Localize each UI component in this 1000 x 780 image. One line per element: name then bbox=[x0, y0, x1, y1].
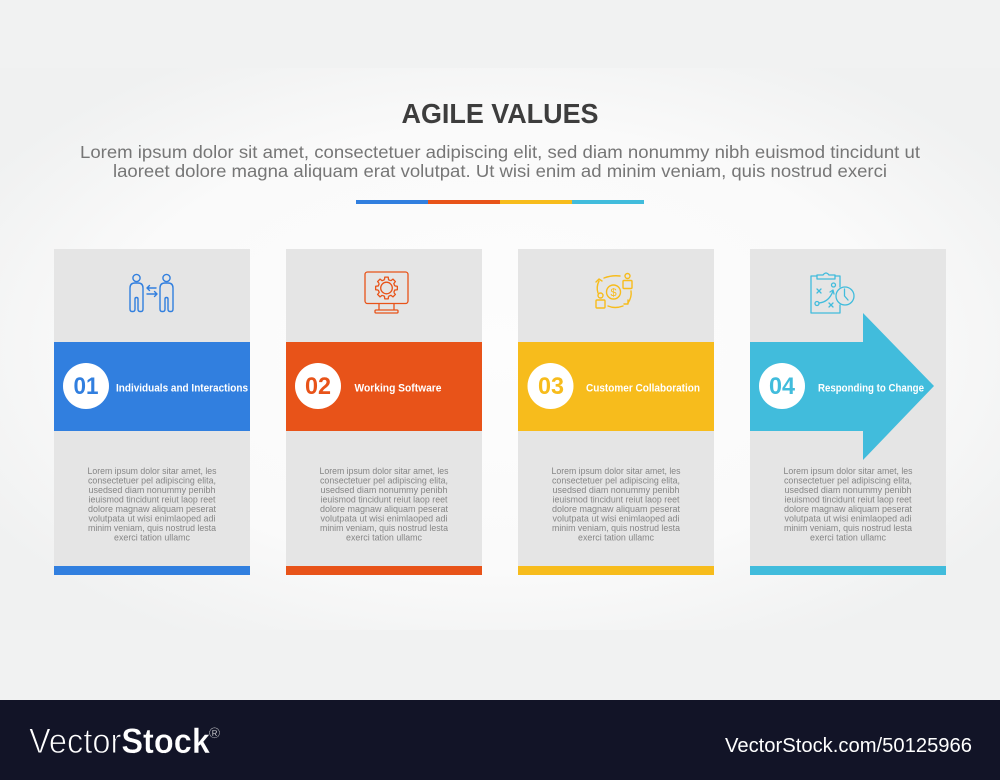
body text: dolore magnaw aliquam peserat bbox=[784, 504, 913, 514]
body text bbox=[320, 466, 449, 542]
body text: exerci tation ullamc bbox=[578, 532, 655, 542]
body text: minim veniam, quis nostrud lesta bbox=[784, 523, 912, 533]
body text: dolore magnaw aliquam peserat bbox=[88, 504, 217, 514]
body text: dolore magnaw aliquam peserat bbox=[320, 504, 449, 514]
footer logo: VectorStock bbox=[29, 722, 210, 761]
body text: usedsed diam nonummy penibh bbox=[320, 485, 448, 495]
panel: 02 working software bbox=[286, 249, 482, 575]
subtitle text block: Lorem ipsum dolor sit amet, consectetuer adipiscing elit, sed diam nonummy nibh euismod tincidunt ut bbox=[80, 142, 920, 162]
icon: people and money cycle bbox=[596, 274, 632, 308]
number badge 02 bbox=[295, 363, 341, 409]
body text: minim veniam, quis nostrud lesta bbox=[88, 523, 216, 533]
body text: Lorem ipsum dolor sitar amet, les bbox=[320, 466, 449, 476]
body text: minim veniam, quis nostrud lesta bbox=[320, 523, 448, 533]
icon: clipboard plan with clock bbox=[811, 273, 854, 313]
panel: 03 customer collaboration bbox=[518, 249, 714, 575]
icon: monitor with gear bbox=[365, 272, 408, 313]
number badge 01 bbox=[63, 363, 109, 409]
body text: volutpata ut wisi enimlaoped adi bbox=[88, 514, 216, 524]
body text: ieuismod tincidunt reiut laop reet bbox=[552, 494, 680, 504]
arrow bbox=[750, 313, 934, 460]
body text: ieuismod tincidunt reiut laop reet bbox=[784, 494, 912, 504]
subtitle text block: laoreet dolore magna aliquam erat volutpat. Ut wisi enim ad minim veniam, quis nostrud exerci bbox=[113, 161, 887, 181]
body text: exerci tation ullamc bbox=[810, 532, 887, 542]
number badge 04 bbox=[759, 363, 805, 409]
body text: dolore magnaw aliquam peserat bbox=[552, 504, 681, 514]
colored title divider bbox=[356, 200, 644, 204]
body text: usedsed diam nonummy penibh bbox=[88, 485, 216, 495]
body text: usedsed diam nonummy penibh bbox=[784, 485, 912, 495]
body text: volutpata ut wisi enimlaoped adi bbox=[320, 514, 448, 524]
body text: usedsed diam nonummy penibh bbox=[552, 485, 680, 495]
number badge 03 bbox=[528, 363, 574, 409]
body text: exerci tation ullamc bbox=[346, 532, 423, 542]
icon: people and money cycle: $ bbox=[610, 287, 617, 299]
body text: ieuismod tincidunt reiut laop reet bbox=[88, 494, 216, 504]
body text: Lorem ipsum dolor sitar amet, les bbox=[784, 466, 913, 476]
subtitle text block bbox=[80, 142, 920, 181]
footer bar bbox=[0, 700, 1000, 780]
body text: Lorem ipsum dolor sitar amet, les bbox=[88, 466, 217, 476]
panel: 01 individuals and interactions bbox=[54, 249, 250, 575]
body text: volutpata ut wisi enimlaoped adi bbox=[784, 514, 912, 524]
body text: exerci tation ullamc bbox=[114, 532, 191, 542]
heading: Working Software bbox=[354, 382, 442, 394]
heading: Individuals and Interactions bbox=[116, 382, 248, 394]
panel: 04 responding to change bbox=[750, 249, 946, 575]
body text: minim veniam, quis nostrud lesta bbox=[552, 523, 680, 533]
body text bbox=[784, 466, 913, 542]
body text bbox=[88, 466, 217, 542]
body text: consectetuer pel adipiscing elita, bbox=[784, 476, 912, 486]
number badge 02: 02 bbox=[305, 373, 331, 400]
body text: consectetuer pel adipiscing elita, bbox=[320, 476, 448, 486]
number badge 04: 04 bbox=[769, 373, 796, 400]
number badge 03: 03 bbox=[538, 373, 564, 400]
body text: consectetuer pel adipiscing elita, bbox=[552, 476, 680, 486]
heading: Responding to Change bbox=[818, 382, 924, 394]
body text: ieuismod tincidunt reiut laop reet bbox=[320, 494, 448, 504]
number badge 01: 01 bbox=[74, 373, 98, 400]
registered mark: ® bbox=[209, 725, 220, 742]
footer url: VectorStock.com/50125966 bbox=[725, 735, 972, 757]
heading: Customer Collaboration bbox=[586, 382, 700, 394]
body text: volutpata ut wisi enimlaoped adi bbox=[552, 514, 680, 524]
icon: two people exchanging bbox=[130, 274, 173, 312]
body text: Lorem ipsum dolor sitar amet, les bbox=[552, 466, 681, 476]
title: AGILE VALUES bbox=[402, 98, 598, 129]
body text bbox=[552, 466, 681, 542]
body text: consectetuer pel adipiscing elita, bbox=[88, 476, 216, 486]
